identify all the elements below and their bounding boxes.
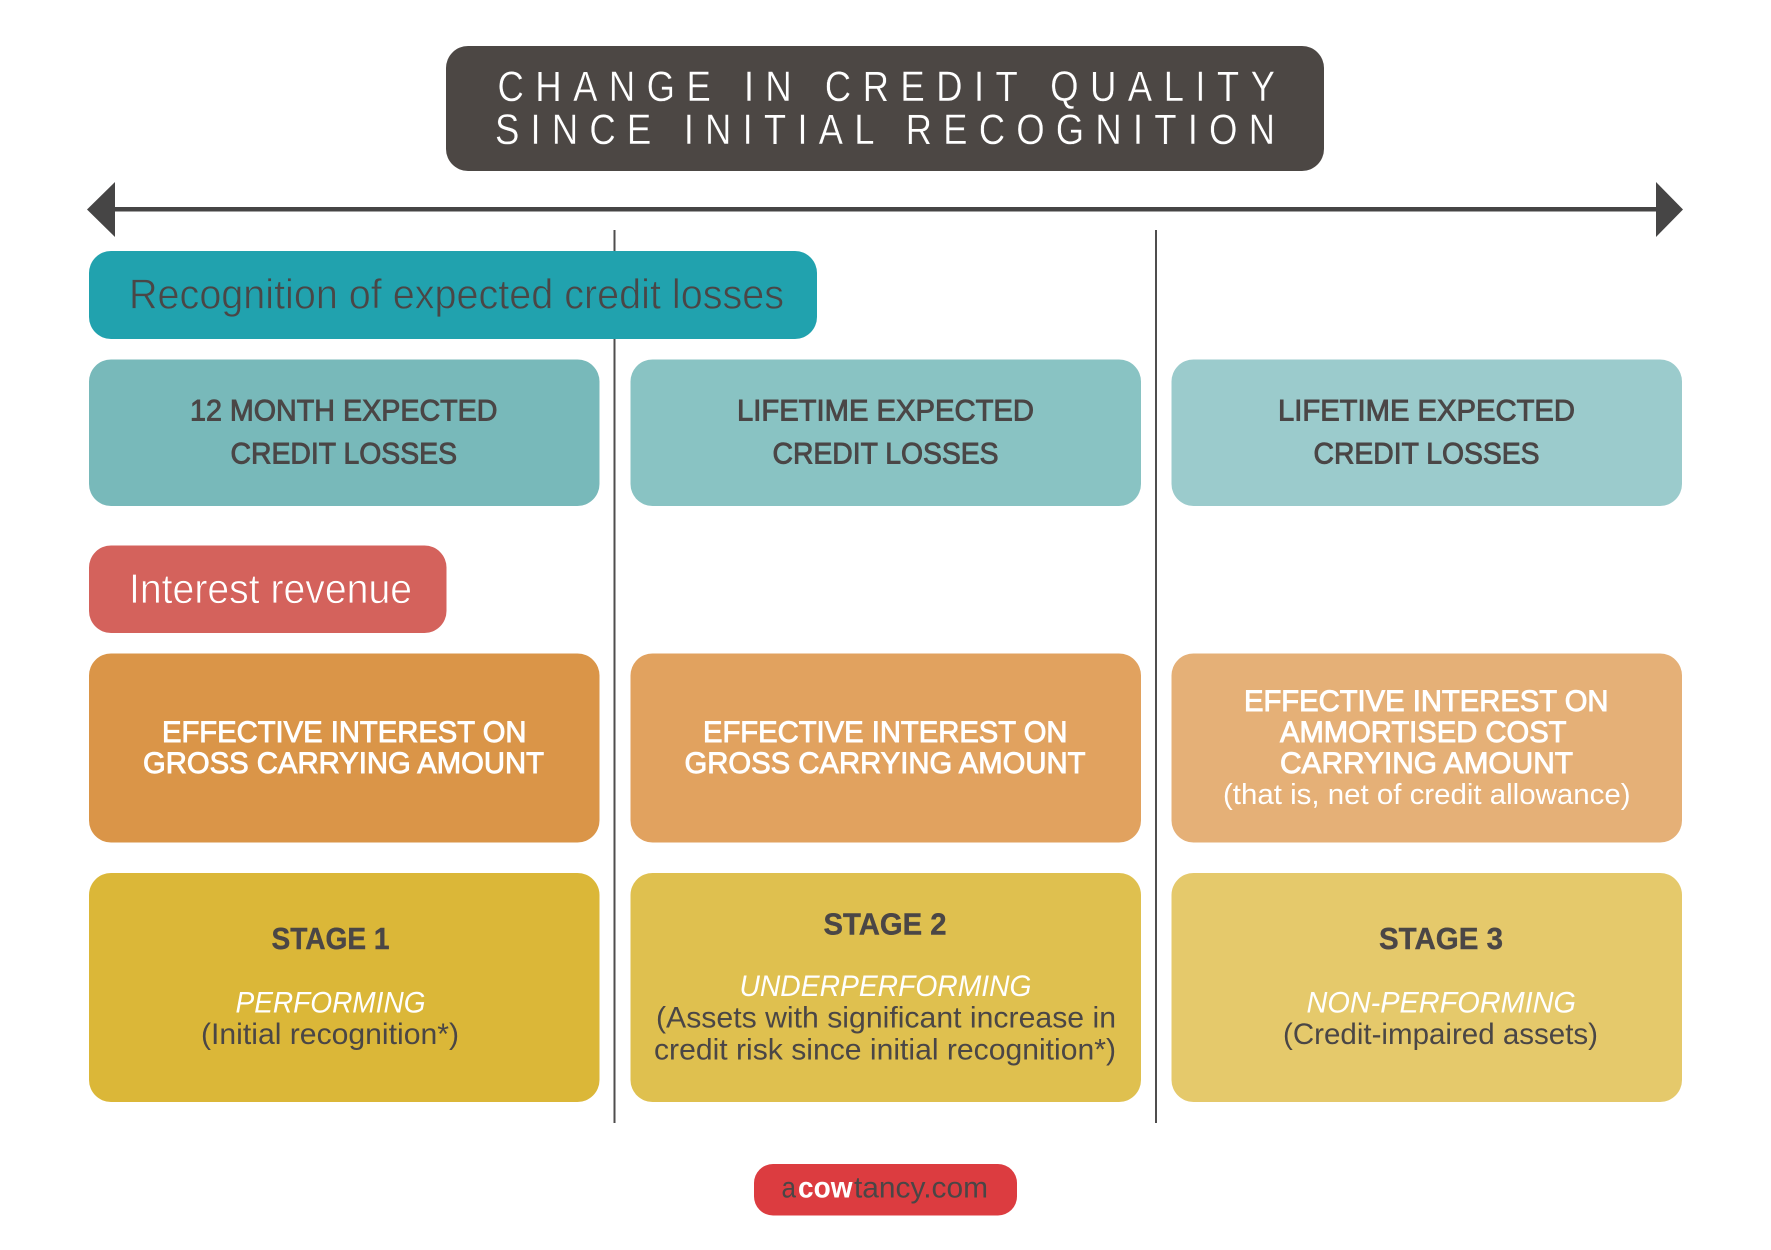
logo badge: acowtancy.com: tancy.com <box>854 1171 988 1204</box>
panel: stage 2: STAGE 2 <box>824 906 946 941</box>
logo badge: acowtancy.com: a <box>782 1171 796 1204</box>
panel: 12 month expected credit losses: 12 MONTH EXPECTED <box>190 394 498 428</box>
title: CHANGE IN CREDIT QUALITY <box>498 63 1275 111</box>
panel: interest revenue <box>89 546 446 633</box>
column divider right <box>1155 230 1157 1123</box>
panel: stage 2: UNDERPERFORMING <box>740 970 1032 1003</box>
panel: effective interest, stage 3: CARRYING AMOUNT <box>1280 747 1573 780</box>
panel: effective interest, stage 3: (that is, net of credit allowance) <box>1223 779 1630 811</box>
panel: stage 3: (Credit-impaired assets) <box>1283 1018 1598 1051</box>
panel: effective interest, stage 2 <box>630 654 1141 842</box>
panel: lifetime expected credit losses, stage 3: LIFETIME EXPECTED <box>1278 394 1575 428</box>
panel: stage 1: (Initial recognition*) <box>201 1018 459 1051</box>
panel: effective interest, stage 3: AMMORTISED COST <box>1280 716 1566 749</box>
panel: interest revenue: Interest revenue <box>129 565 412 612</box>
column divider left <box>614 230 616 1123</box>
panel: stage 2: credit risk since initial recognition*) <box>654 1034 1116 1066</box>
panel: stage 2 <box>630 873 1141 1102</box>
logo badge: acowtancy.com <box>754 1164 1017 1216</box>
panel: lifetime expected credit losses, stage 2: CREDIT LOSSES <box>772 438 998 470</box>
panel: effective interest, stage 1: GROSS CARRYING AMOUNT <box>143 747 544 780</box>
panel: stage 1 <box>89 873 600 1102</box>
panel: stage 1: PERFORMING <box>236 986 426 1020</box>
panel: lifetime expected credit losses, stage 2 <box>630 360 1141 506</box>
panel: recognition of expected credit losses: Recognition of expected credit losses <box>129 270 784 318</box>
logo badge: acowtancy.com: cow <box>798 1171 853 1204</box>
panel: 12 month expected credit losses: CREDIT LOSSES <box>230 438 457 470</box>
panel: effective interest, stage 2: GROSS CARRYING AMOUNT <box>684 747 1086 780</box>
panel: stage 3: STAGE 3 <box>1379 921 1503 956</box>
panel: stage 1: STAGE 1 <box>272 921 390 956</box>
panel: effective interest, stage 2: EFFECTIVE INTEREST ON <box>703 716 1068 749</box>
panel: effective interest, stage 3 <box>1172 654 1682 842</box>
panel: stage 3 <box>1172 873 1682 1102</box>
panel: 12 month expected credit losses <box>89 360 600 506</box>
double-headed arrow <box>87 182 1683 237</box>
panel: lifetime expected credit losses, stage 3 <box>1172 360 1682 506</box>
panel: lifetime expected credit losses, stage 2: LIFETIME EXPECTED <box>737 394 1034 428</box>
panel: effective interest, stage 1: EFFECTIVE INTEREST ON <box>162 716 526 749</box>
panel: stage 2: (Assets with significant increase in <box>656 1002 1116 1034</box>
title <box>446 46 1324 171</box>
title: SINCE INITIAL RECOGNITION <box>495 106 1275 154</box>
panel: stage 3: NON-PERFORMING <box>1306 986 1576 1020</box>
panel: effective interest, stage 1 <box>89 654 600 842</box>
panel: lifetime expected credit losses, stage 3: CREDIT LOSSES <box>1314 438 1540 470</box>
panel: recognition of expected credit losses <box>89 251 817 339</box>
panel: effective interest, stage 3: EFFECTIVE INTEREST ON <box>1244 685 1608 718</box>
